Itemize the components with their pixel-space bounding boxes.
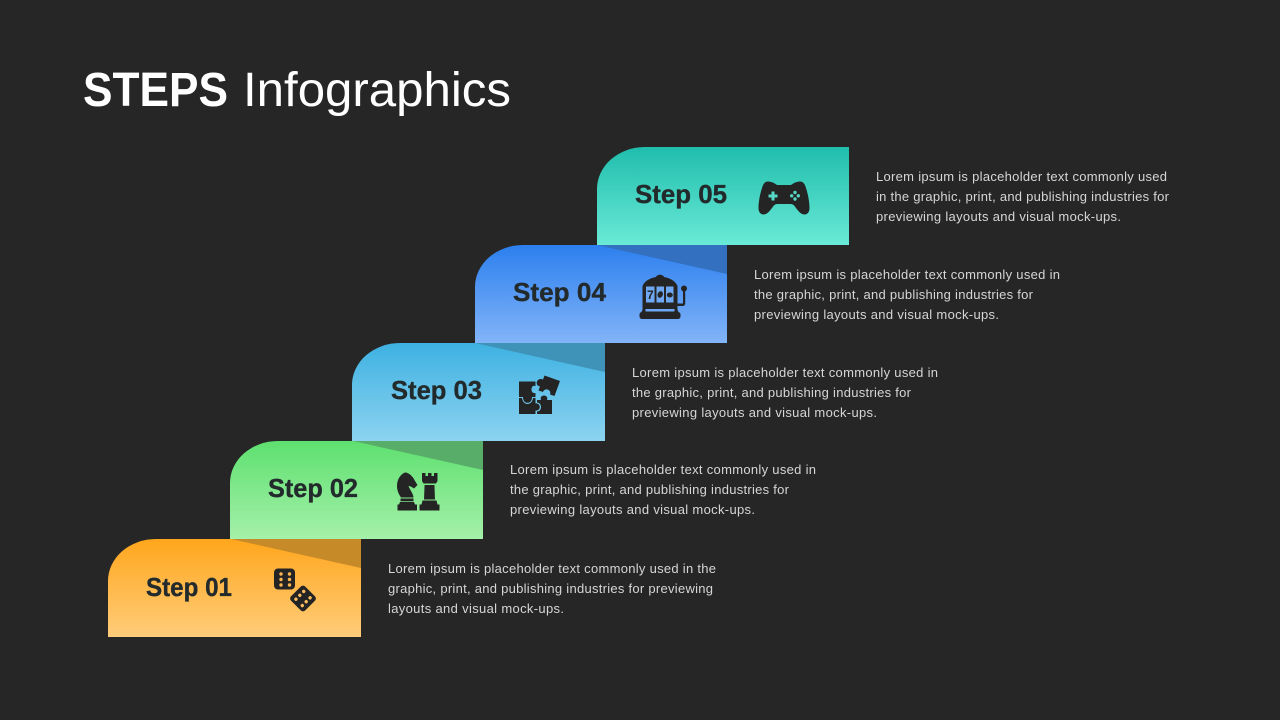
step 01 fold shadow: [231, 539, 361, 568]
step 04 description: the graphic, print, and publishing industries for: [754, 287, 1034, 302]
step 04 label: Step 04: [513, 277, 607, 307]
title: [83, 64, 511, 117]
title: Infographics: [243, 64, 511, 117]
step 05 description: in the graphic, print, and publishing industries for: [876, 189, 1170, 204]
step 03 tab: [352, 343, 605, 441]
step 01 tab: [108, 539, 361, 637]
icon: slot machine: 7: [647, 288, 654, 302]
panel: step 01: [108, 539, 716, 637]
step 04 description: previewing layouts and visual mock-ups.: [754, 307, 999, 322]
icon: game controller: [758, 182, 810, 214]
step 02 label: Step 02: [268, 473, 358, 503]
icon: dice: [274, 568, 317, 613]
step 03 label: Step 03: [391, 375, 482, 405]
step 03 description: previewing layouts and visual mock-ups.: [632, 405, 877, 420]
panel: step 03: [352, 343, 938, 441]
title: STEPS: [83, 64, 228, 117]
step 02 fold shadow: [353, 441, 483, 470]
icon: chess pieces: [397, 472, 440, 510]
step 03 description: Lorem ipsum is placeholder text commonly used in: [632, 365, 938, 380]
step 01 description: layouts and visual mock-ups.: [388, 601, 564, 616]
step 04 fold shadow: [597, 245, 727, 274]
icon: puzzle pieces: [519, 376, 560, 414]
step 03 description: the graphic, print, and publishing industries for: [632, 385, 912, 400]
step 02 description: the graphic, print, and publishing industries for: [510, 482, 790, 497]
step 02 description: Lorem ipsum is placeholder text commonly used in: [510, 462, 816, 477]
icon: slot machine: [640, 275, 687, 319]
panel: step 04: [475, 245, 1060, 343]
step 05 label: Step 05: [635, 179, 727, 209]
step 05 description: previewing layouts and visual mock-ups.: [876, 209, 1121, 224]
step 01 label: Step 01: [146, 572, 232, 602]
step 02 tab: [230, 441, 483, 539]
step 05 description: Lorem ipsum is placeholder text commonly used: [876, 169, 1167, 184]
step 04 tab: [475, 245, 727, 343]
step 02 description: previewing layouts and visual mock-ups.: [510, 502, 755, 517]
step 01 description: graphic, print, and publishing industries for previewing: [388, 581, 713, 596]
step 03 fold shadow: [475, 343, 605, 372]
step 05 tab: [597, 147, 849, 245]
panel: step 02: [230, 441, 816, 539]
panel: step 05: [597, 147, 1170, 245]
step 01 description: Lorem ipsum is placeholder text commonly used in the: [388, 561, 716, 576]
step 04 description: Lorem ipsum is placeholder text commonly used in: [754, 267, 1060, 282]
